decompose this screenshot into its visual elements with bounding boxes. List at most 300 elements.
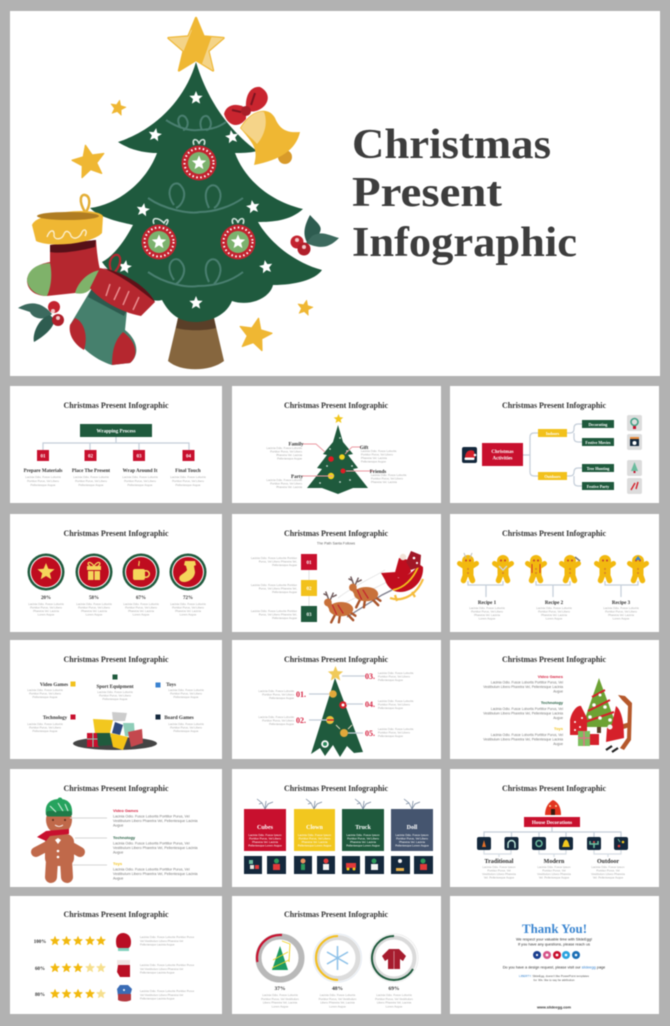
- step line: [308, 570, 310, 606]
- title: [352, 122, 577, 266]
- tree garlands: [148, 116, 243, 286]
- step labels: Prepare Materials: [24, 469, 62, 474]
- recipe text: Porttitor Purus, Vel Libero: [605, 610, 637, 614]
- group text: Porttitor Purus, Vel: [542, 868, 566, 872]
- step text: Pellentesque Augue: [272, 590, 297, 594]
- step text: Lacinia Odio. Fusce Lobortis: [170, 475, 206, 479]
- right aligned text: Vestibulum Libero Pharetra Vel, Pellentesque Lacinia: [483, 737, 563, 741]
- badge text: Porttitor Purus, Vel Libero: [78, 606, 110, 610]
- card text: Pharetra Vel. Lacinia: [399, 840, 425, 844]
- card text: Porttitor Purus, Vel Libero: [396, 836, 428, 840]
- badge star: [28, 554, 64, 590]
- ring percents: 37%: [274, 986, 286, 992]
- group labels: Outdoor: [597, 859, 619, 865]
- connectors: [43, 437, 189, 450]
- label text: Porttitor Purus, Vel Libero: [371, 476, 403, 480]
- gingerbread text: Vestibulum Libero Pharetra Vel, Pellentesque Lacinia: [113, 846, 198, 850]
- panel: numbered tree: [232, 640, 441, 759]
- step boxes: 02: [88, 454, 94, 460]
- panel: christmas activities: Christmas Present Infographic: [502, 401, 606, 410]
- panel: gingerbread recipes: [450, 514, 659, 632]
- small brackets: [484, 850, 621, 857]
- gingerbread text: Video Games: [113, 808, 139, 813]
- panel: star ratings: Christmas Present Infographic: [64, 910, 169, 919]
- number text: Porttitor Purus, Vel Libero: [262, 718, 294, 722]
- recipe text: Lorem Augue: [546, 616, 563, 620]
- badge gift: [76, 554, 112, 590]
- right aligned text: Augue: [553, 742, 563, 746]
- badge text: Lacinia Odio. Fusce Lobortis: [123, 602, 159, 606]
- badge text: Lorem Augue: [38, 612, 55, 616]
- step boxes: 03: [306, 613, 312, 618]
- harness: [347, 590, 392, 617]
- card text: Pharetra Vel. Lacinia: [252, 840, 278, 844]
- sleigh trails: [338, 570, 395, 603]
- numbers: 04.: [365, 700, 375, 709]
- label text: [267, 446, 407, 489]
- step text: Porttitor Purus, Vel Libero: [172, 479, 204, 483]
- category text: Lacinia Odio. Fusce Lobortis: [97, 690, 133, 694]
- panel: christmas tree labels: Christmas Present Infographic: [284, 401, 388, 410]
- panel: numbered tree: Christmas Present Infographic: [284, 655, 388, 664]
- rating percents: 100%: [34, 940, 46, 945]
- step text: Lacinia Odio. Fusce Lobortis Porttitor: [251, 609, 297, 613]
- panel: wrapping process: [10, 386, 222, 503]
- ring percents: 48%: [332, 986, 343, 992]
- step text: Lacinia Odio. Fusce Lobortis: [73, 475, 109, 479]
- category labels: Sport Equipment: [96, 685, 134, 690]
- house icon: [545, 800, 561, 815]
- step text: Porttitor Purus, Vel Libero: [124, 479, 156, 483]
- ring text: Porttitor Purus, Vel Vestibulum: [375, 997, 414, 1001]
- badge text: Pharetra Vel. Lacinia: [175, 609, 201, 613]
- step boxes: [301, 554, 317, 622]
- holly right: [290, 215, 339, 256]
- badge text: Lorem Augue: [180, 612, 197, 616]
- panel: toy categories: Christmas Present Infographic: [284, 784, 388, 793]
- heading box: [524, 817, 580, 827]
- gingerbread text: Lacinia Odio. Fusce Lobortis Porttitor Purus, Vel: [113, 842, 190, 846]
- card text: Lacinia Odio. Fusce Ipsum: [298, 833, 331, 837]
- label text: Lacinia Odio. Fusce Lobortis: [361, 449, 396, 453]
- card text: Porttitor Purus, Vel Libero: [249, 836, 281, 840]
- twigs: [257, 799, 420, 809]
- right aligned text: Video Games: [538, 674, 564, 679]
- numbers: 05.: [365, 729, 375, 738]
- step text: Pellentesque Augue: [31, 483, 56, 487]
- step text: Pellentesque Augue: [176, 483, 201, 487]
- rating text: Vel Vestibulum Libero Pharetra Vel: [140, 967, 183, 971]
- card text: Pharetra Vel. Lacinia: [350, 840, 376, 844]
- number text: Lacinia Odio. Fusce Lobortis: [378, 671, 413, 675]
- panel: thank you: [450, 896, 659, 1014]
- stocking yellow cuff: [27, 195, 103, 296]
- gingerbread text: Lacinia Odio. Fusce Lobortis Porttitor Purus, Vel: [113, 814, 190, 818]
- tree star: [328, 666, 343, 680]
- category text: Lacinia Odio. Fusce Lobortis: [168, 688, 204, 692]
- panel: santa path: [232, 514, 441, 632]
- pink connectors: [302, 444, 374, 476]
- thank you heading: Thank You!: [522, 921, 587, 936]
- label text: Porttitor Purus, Vel Libero: [270, 450, 302, 454]
- right aligned text: Vestibulum Libero Pharetra Vel, Pellentesque Lacinia: [483, 685, 563, 689]
- group text: Vel. Pellentesque Augue: [539, 876, 570, 880]
- step text: Purus, Vel Libero Pharetra Vel,: [259, 612, 297, 616]
- badge mug: [122, 554, 160, 590]
- recipe text: [469, 606, 639, 620]
- label text: Porttitor Purus, Vel Libero: [270, 482, 302, 486]
- percent labels: 72%: [183, 596, 193, 601]
- card titles: Doll: [407, 825, 418, 831]
- title: Infographic: [352, 220, 577, 266]
- badge text: Lacinia Odio. Fusce Lobortis: [76, 602, 112, 606]
- gingerbread text: Augue: [113, 824, 123, 828]
- right aligned text: Technology: [541, 700, 564, 705]
- badge text: Lorem Augue: [86, 612, 103, 616]
- numbers: [296, 672, 375, 738]
- rating text: Vel Vestibulum Libero Pharetra Vel: [140, 939, 183, 943]
- panel: gift categories: Christmas Present Infographic: [64, 655, 169, 664]
- recipe labels: [478, 601, 631, 606]
- bow: [224, 87, 268, 125]
- ring percents: [274, 986, 400, 992]
- label text: Lacinia Odio. Fusce Lobortis: [371, 473, 406, 477]
- step text: Pellentesque Augue: [79, 483, 104, 487]
- ring text: Libero Pharetra Vel, Lacinia: [320, 1001, 355, 1005]
- panel: hero cover: [10, 11, 660, 376]
- rating stars: [51, 936, 105, 998]
- green boxes: [582, 420, 614, 490]
- group labels: [485, 859, 619, 865]
- number text: Lacinia Odio. Fusce Lobortis: [259, 689, 294, 693]
- gingerbread text: [113, 808, 198, 880]
- tree baubles: [321, 690, 352, 748]
- tree trunk: [168, 318, 224, 369]
- card text: Lacinia Odio. Fusce Ipsum: [346, 833, 380, 837]
- category labels: Toys: [166, 683, 176, 688]
- panel: gift categories: [10, 640, 222, 759]
- number text: Porttitor Purus, Vel Libero: [378, 702, 410, 706]
- ring text: Lorem Augue: [329, 1004, 346, 1008]
- ring text: [261, 993, 414, 1008]
- sleigh: [381, 551, 423, 601]
- santa hat icon: [462, 447, 477, 463]
- step text: Lacinia Odio. Fusce Lobortis: [25, 475, 61, 479]
- ring text: Libero Pharetra Vel, Lacinia: [263, 1001, 298, 1005]
- card text: Porttitor Purus, Vel Libero: [299, 836, 331, 840]
- center box: Activities: [492, 456, 513, 462]
- panel: progress rings: [232, 896, 441, 1014]
- number text: Lacinia Odio. Fusce Lobortis: [378, 727, 413, 731]
- recipe text: Lacinia Odio. Fusce Lobortis: [469, 606, 505, 610]
- number text: Pellentesque Augue: [269, 696, 294, 700]
- credit line: LIBERTY: SlideEgg, doesn't like PowerPoint templates: [519, 974, 589, 978]
- panel: wrapping process: Christmas Present Infographic: [64, 401, 169, 410]
- subtitle: The Path Santa Follows: [317, 542, 355, 546]
- panel: christmas activities: [450, 386, 659, 503]
- step labels: [24, 469, 201, 474]
- toy icons: [249, 858, 427, 871]
- yellow boxes: Outdoors: [544, 474, 561, 479]
- panel: house decorations: [450, 769, 659, 887]
- legend squares: [70, 674, 160, 720]
- step text: Lacinia Odio. Fusce Lobortis: [122, 475, 158, 479]
- category text: Pellentesque Augue: [174, 695, 199, 699]
- thank you message: If you have any questions, please reach us: [518, 942, 590, 946]
- green box labels: Tree Hunting: [587, 466, 609, 471]
- step text: Purus, Vel Libero Pharetra Vel,: [259, 586, 297, 590]
- rating percents: 60%: [35, 967, 45, 972]
- category text: Pellentesque Augue: [103, 697, 128, 701]
- panel: star ratings: [10, 896, 222, 1014]
- labels: Party: [291, 475, 303, 480]
- group text: Lacinia Odio. Fusce Ipsum: [537, 865, 571, 869]
- gingerbread text: Augue: [113, 876, 123, 880]
- rating text: Vel Vestibulum Libero Pharetra Vel: [140, 993, 183, 997]
- toy icon tiles: [244, 856, 433, 874]
- step boxes: 03: [136, 454, 142, 460]
- yellow boxes: Indoors: [546, 431, 560, 436]
- recipe text: Porttitor Purus, Vel Libero: [538, 610, 570, 614]
- gift pile: [73, 712, 157, 750]
- brackets: [468, 581, 638, 597]
- step labels: Wrap Around It: [123, 469, 158, 474]
- center box: [482, 443, 523, 466]
- recipe text: Lacinia Odio. Fusce Lobortis: [536, 606, 572, 610]
- labels: [288, 442, 386, 480]
- activity icons: [627, 415, 642, 494]
- ring sweater: [370, 934, 418, 982]
- badge text: Lorem Augue: [133, 612, 150, 616]
- panel: percent badges: [10, 514, 222, 632]
- gingerbread text: Vestibulum Libero Pharetra Vel, Pellentesque Lacinia: [113, 819, 198, 823]
- rating text: Lacinia Odio. Fusce Lobortis Porttitor Purus: [140, 989, 194, 993]
- label text: Pellentesque Augue: [361, 460, 386, 464]
- rating percents: [34, 940, 46, 998]
- card titles: [257, 825, 418, 831]
- step labels: Place The Present: [72, 469, 110, 474]
- group text: Vestibulum Libero Pharetra: [537, 872, 571, 876]
- step text: Porttitor Purus, Vel Libero: [75, 479, 107, 483]
- panel: percent badges: Christmas Present Infographic: [64, 529, 169, 538]
- badge text: Pharetra Vel. Lacinia: [81, 609, 107, 613]
- title: Present: [352, 170, 502, 216]
- heading box: House Decorations: [532, 821, 572, 826]
- gingerbread text: Vestibulum Libero Pharetra Vel, Pellentesque Lacinia: [113, 872, 198, 876]
- right aligned text: [483, 674, 564, 746]
- category text: Porttitor Purus, Vel Libero: [170, 692, 202, 696]
- gingerbread text: Lacinia Odio. Fusce Lobortis Porttitor Purus, Vel: [113, 868, 190, 872]
- panel: house decorations: Christmas Present Infographic: [502, 784, 606, 793]
- label text: Pharetra Vel. Lacinia: [371, 480, 397, 484]
- card text: Porttitor Purus, Vel Libero: [347, 836, 379, 840]
- santa tree illustration: [570, 678, 632, 752]
- label text: Lacinia Odio. Fusce Lobortis: [267, 478, 302, 482]
- recipe labels: Recipe 2: [545, 601, 564, 606]
- recipe labels: Recipe 3: [612, 601, 631, 606]
- right aligned text: Lacinia Odio. Fusce Lobortis Porttitor Purus, Vel: [491, 733, 563, 737]
- panel: santa and tree: Christmas Present Infographic: [502, 655, 606, 664]
- badge text: Pharetra Vel. Lacinia: [33, 609, 59, 613]
- panel: santa and tree: [450, 640, 659, 759]
- gingerbread text: Technology: [113, 835, 136, 840]
- card text: Lacinia Odio. Fusce Ipsum: [395, 833, 429, 837]
- ring text: Lacinia Odio. Fusce Lobortis: [320, 993, 355, 997]
- ring text: Lacinia Odio. Fusce Lobortis: [376, 993, 412, 997]
- recipe text: Lacinia Odio. Fusce Lobortis: [603, 606, 639, 610]
- group labels: Modern: [544, 859, 565, 865]
- badge text: Porttitor Purus, Vel Libero: [30, 606, 62, 610]
- gingerbread text: Toys: [113, 861, 123, 866]
- rating text: [140, 935, 195, 1001]
- recipe text: Lorem Augue: [613, 616, 630, 620]
- group text: Lacinia Odio. Fusce Ipsum: [482, 865, 516, 869]
- label text: Porttitor Purus, Vel Libero: [361, 452, 393, 456]
- badge text: Lacinia Odio. Fusce Lobortis: [170, 602, 206, 606]
- category text: Lacinia Odio. Fusce Lobortis: [27, 688, 63, 692]
- numbers: 03.: [365, 672, 375, 681]
- category labels: Board Games: [164, 716, 194, 721]
- category text: Pellentesque Augue: [33, 729, 58, 733]
- arrows: [309, 676, 365, 733]
- ring text: Lacinia Odio. Fusce Lobortis: [262, 993, 298, 997]
- category text: Porttitor Purus, Vel Libero: [29, 726, 61, 730]
- group labels: Traditional: [485, 859, 514, 865]
- number text: Porttitor Purus, Vel Libero: [262, 692, 294, 696]
- percent labels: 67%: [136, 596, 146, 601]
- ring text: Porttitor Purus, Vel Vestibulum: [319, 997, 357, 1001]
- panel: christmas tree labels: [232, 386, 441, 503]
- number text: Pellentesque Augue: [269, 722, 294, 726]
- right aligned text: Lacinia Odio. Fusce Lobortis Porttitor Purus, Vel: [491, 707, 563, 711]
- category labels: Video Games: [40, 683, 68, 688]
- baubles: [142, 140, 256, 260]
- center box: Christmas: [491, 450, 514, 455]
- step labels: Final Touch: [175, 469, 201, 474]
- card text: Pellentesque Lorem Augue: [395, 844, 429, 848]
- badge text: Lacinia Odio. Fusce Lobortis: [28, 602, 64, 606]
- right aligned text: Augue: [553, 716, 563, 720]
- rating text: Pellentesque Lacinia Augue: [140, 943, 175, 947]
- number text: Lacinia Odio. Fusce Lobortis: [378, 699, 413, 703]
- rating text: Pellentesque Lacinia Augue: [140, 971, 175, 975]
- step boxes: 04: [186, 454, 192, 460]
- credit line: for. We. like to say be attribution: [533, 978, 575, 982]
- percent labels: 58%: [89, 596, 99, 601]
- category text: Porttitor Purus, Vel Libero: [99, 694, 131, 698]
- step text: Pellentesque Augue: [128, 483, 153, 487]
- numbers: 02.: [296, 716, 306, 725]
- recipe labels: Recipe 1: [478, 601, 497, 606]
- category text: Porttitor Purus, Vel Libero: [29, 692, 61, 696]
- label text: Pharetra Vel. Lacinia: [276, 453, 302, 457]
- right aligned text: Toys: [554, 726, 564, 731]
- labels: Family: [288, 442, 304, 448]
- card text: Pellentesque Lorem Augue: [248, 844, 282, 848]
- ring percents: 69%: [388, 986, 400, 992]
- tree connectors: [523, 424, 582, 486]
- green box labels: Festive Party: [587, 484, 609, 489]
- step text: Lacinia Odio. Fusce Lobortis Porttitor: [251, 556, 297, 560]
- step boxes: 01: [306, 561, 312, 566]
- jagged tree: [311, 678, 363, 757]
- group text: Vel. Pellentesque Augue: [484, 876, 515, 880]
- card text: [248, 833, 429, 848]
- card text: Pellentesque Lorem Augue: [298, 844, 332, 848]
- category cards: [244, 809, 433, 851]
- title: Christmas: [352, 122, 551, 168]
- recipe text: Porttitor Purus, Vel Libero: [471, 610, 503, 614]
- badge text: Porttitor Purus, Vel Libero: [125, 606, 157, 610]
- card titles: Clown: [306, 825, 323, 831]
- step text: [25, 475, 206, 487]
- step boxes: [37, 450, 194, 461]
- decoration icons: [482, 839, 624, 848]
- label text: Pharetra Vel. Lacinia: [361, 456, 387, 460]
- number text: Porttitor Purus, Vel Libero: [378, 674, 410, 678]
- rating text: Lacinia Odio. Fusce Lobortis Porttitor Purus: [140, 963, 194, 967]
- number text: Pellentesque Augue: [378, 706, 403, 710]
- category text: Lacinia Odio. Fusce Lobortis: [168, 722, 204, 726]
- gingerbread cookies: [460, 555, 646, 580]
- badge sock: [170, 554, 206, 590]
- category text: Lacinia Odio. Fusce Lobortis: [27, 722, 63, 726]
- number text: Porttitor Purus, Vel Libero: [378, 730, 410, 734]
- step text: Lacinia Odio. Fusce Lobortis Porttitor: [251, 583, 297, 587]
- panel: toy categories: [232, 769, 441, 887]
- pointer lines: [70, 818, 107, 865]
- card titles: Cubes: [257, 825, 274, 831]
- recipe text: Pharetra Vel. Lacinia: [474, 613, 500, 617]
- labels: Friends: [370, 470, 386, 475]
- step text: Purus, Vel Libero Pharetra Vel,: [259, 560, 297, 564]
- badge text: Pharetra Vel. Lacinia: [128, 609, 154, 613]
- holly left: [18, 301, 64, 342]
- green box labels: Decorating: [589, 422, 607, 427]
- percent labels: [41, 596, 193, 601]
- label text: Pellentesque Augue: [277, 456, 302, 460]
- card text: Pharetra Vel. Lacinia: [302, 840, 328, 844]
- number text: Pellentesque Augue: [378, 678, 403, 682]
- panel: progress rings: Christmas Present Infographic: [284, 910, 388, 919]
- recipe text: Pharetra Vel. Lacinia: [608, 613, 634, 617]
- heading box: Wrapping Process: [96, 430, 136, 434]
- panel: big gingerbread: [10, 769, 222, 887]
- heading box: [80, 424, 152, 437]
- ring tree: [257, 935, 302, 980]
- group text: Porttitor Purus, Vel: [596, 868, 620, 872]
- social icons: [533, 951, 580, 959]
- connector: [484, 827, 621, 837]
- labels: Gift: [360, 446, 369, 451]
- category text: Porttitor Purus, Vel Libero: [170, 726, 202, 730]
- top star: [166, 16, 226, 72]
- ring text: Lorem Augue: [272, 1004, 289, 1008]
- number text: Lacinia Odio. Fusce Lobortis: [259, 715, 294, 719]
- group text: [482, 865, 625, 880]
- step boxes: 01: [40, 454, 46, 460]
- step boxes: 02: [306, 587, 312, 592]
- number text: [259, 671, 414, 738]
- category labels: [40, 683, 194, 721]
- group text: Vestibulum Libero Pharetra: [591, 872, 625, 876]
- stocking green sock: [70, 255, 155, 365]
- tree: [307, 414, 368, 494]
- decoration tiles: [477, 837, 628, 850]
- ring text: Libero Pharetra Vel, Lacinia: [377, 1001, 412, 1005]
- bell: [240, 111, 300, 165]
- clothing icons: [116, 933, 132, 1002]
